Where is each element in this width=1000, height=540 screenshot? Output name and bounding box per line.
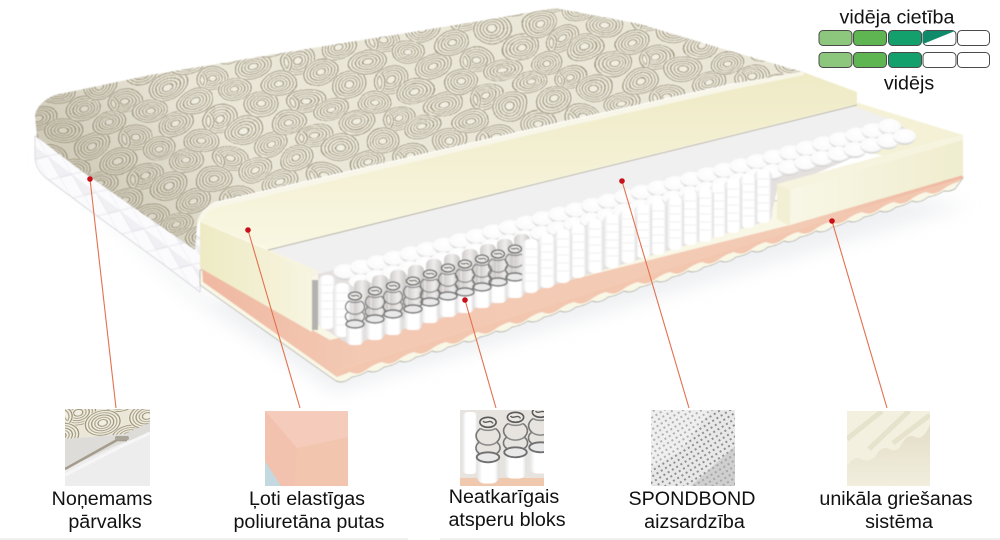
feature: spring block [448, 407, 566, 531]
dark gap beneath the fabric [318, 124, 913, 345]
pocket spring dome rows [334, 119, 916, 290]
left foam block [200, 222, 320, 332]
text: unikāla griešanas sistēma: sistēma [865, 511, 933, 533]
white fabric layer [268, 106, 897, 276]
right foam back strip [852, 101, 963, 176]
right foam block [777, 135, 963, 226]
thumbnail: pink foam block [265, 411, 348, 486]
text: Ļoti elastīgas poliuretāna putas [233, 488, 385, 533]
text: SPONDBOND aizsardzība: SPONDBOND [629, 488, 755, 510]
upper foam slab [200, 72, 857, 249]
thumbnail: pocket springs [460, 410, 544, 486]
feature: removable cover [52, 409, 152, 533]
thumbnail: wavy foam [847, 411, 930, 486]
pink foam layer [202, 175, 963, 377]
pockets behind exposed springs [354, 234, 530, 330]
text: Noņemams pārvalks: pārvalks [68, 511, 142, 533]
mattress illustration [0, 0, 963, 382]
leader line: spondbond [619, 178, 689, 408]
leader line: wave system [829, 218, 887, 408]
bottom hardness bar row [819, 52, 990, 68]
feature: spondbond [629, 410, 755, 533]
text: Noņemams pārvalks [52, 488, 152, 533]
feature: elastic foam [233, 411, 385, 533]
wave scallops cut into the pink [337, 178, 963, 377]
feature: wave system [819, 411, 973, 533]
text: SPONDBOND aizsardzība [629, 488, 755, 533]
text: Ļoti elastīgas poliuretāna putas: Ļoti elastīgas [249, 488, 365, 510]
bottom faint strip [0, 538, 1000, 540]
text: Ļoti elastīgas poliuretāna putas: poliuretāna putas [233, 511, 385, 533]
leader line: elastic foam [245, 227, 300, 408]
top hardness bar row [819, 30, 990, 46]
left edge pockets [312, 275, 351, 337]
text: Neatkarīgais atsperu bloks [448, 486, 566, 531]
text: Neatkarīgais atsperu bloks: atsperu bloks [448, 509, 566, 531]
bottom wavy cream layer [200, 178, 963, 382]
slab lower shadow line [268, 105, 857, 250]
text: unikāla griešanas sistēma [819, 488, 973, 533]
exposed spring row [345, 245, 525, 345]
thumbnail: dotted fabric [651, 410, 735, 486]
wrapped white pocket springs [522, 169, 772, 293]
text: unikāla griešanas sistēma: unikāla griešanas [819, 488, 973, 510]
quilted side of the mattress [35, 136, 203, 292]
thumbnail: zipper [65, 409, 150, 486]
drop shadow under mattress [30, 150, 970, 392]
leader line: spring block [462, 297, 496, 408]
text: Neatkarīgais atsperu bloks: Neatkarīgais [449, 486, 559, 508]
label: vidēja cietība: vidēja cietība [840, 6, 955, 28]
hardness scale: vidēja cietība / vidējs [819, 6, 990, 94]
label: vidējs: vidējs [884, 72, 934, 94]
text: Noņemams pārvalks: Noņemams [52, 488, 152, 510]
removable swirl cover [34, 8, 804, 250]
leader line: cover [87, 176, 116, 408]
text: SPONDBOND aizsardzība: aizsardzība [644, 511, 745, 533]
